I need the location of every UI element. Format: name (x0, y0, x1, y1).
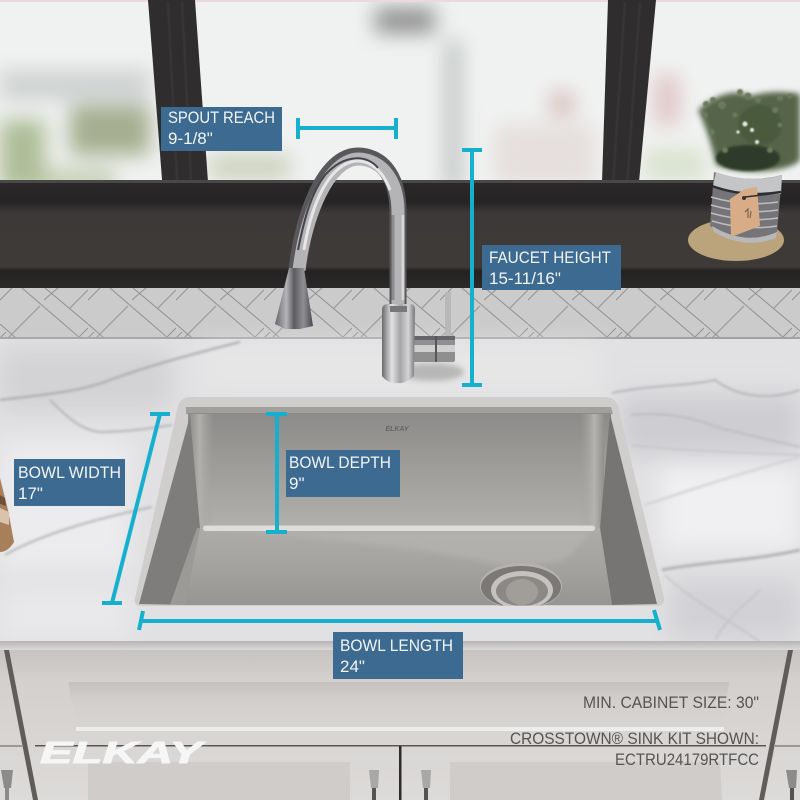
window frame: right mullion (597, 0, 656, 205)
left cabinet stile (4, 650, 38, 800)
label: bowl length (333, 632, 463, 679)
dimension: spout reach (298, 118, 396, 139)
tin can (710, 172, 782, 243)
faucet (275, 156, 464, 383)
label: spout reach: 9-1/8" (168, 129, 213, 148)
cutting board at left edge (0, 478, 14, 552)
counter front edge (0, 641, 800, 650)
floor reflection (210, 532, 590, 568)
sink (135, 397, 664, 609)
faucet lever handle (410, 292, 455, 362)
dimension: bowl width (102, 414, 170, 603)
right door panel (450, 762, 722, 800)
minimum cabinet size note: MIN. CABINET SIZE: 30" (583, 693, 759, 712)
faucet base (382, 304, 415, 383)
sink kit note (510, 729, 759, 769)
label: faucet height (482, 245, 621, 290)
label: bowl depth (286, 450, 400, 497)
cork coaster (688, 219, 784, 261)
window frame: left mullion (148, 0, 208, 205)
sink basin floor (185, 528, 612, 605)
left door panel (88, 762, 350, 800)
label: faucet height: 15-11/16" (489, 269, 561, 288)
plant foliage (698, 89, 800, 171)
countertop (0, 339, 800, 650)
label: faucet height: FAUCET HEIGHT (489, 248, 611, 267)
sink kit note: ECTRU24179RTFCC (615, 750, 759, 769)
marble veins (0, 342, 800, 642)
sink basin back wall (188, 413, 611, 529)
backsplash (0, 288, 800, 340)
label: bowl length: BOWL LENGTH (340, 636, 453, 655)
sink left wall (139, 416, 200, 605)
sink rim (135, 397, 664, 606)
dimension: bowl depth (266, 414, 287, 532)
faucet shadow (400, 363, 464, 381)
label: bowl width (14, 459, 125, 506)
right cabinet stile (759, 650, 793, 800)
sink drain (480, 563, 562, 609)
elkay logo: ELKAY (40, 735, 207, 770)
sink inner lip (186, 407, 613, 414)
label: spout reach: SPOUT REACH (168, 108, 275, 127)
label: bowl width: BOWL WIDTH (18, 463, 121, 482)
right side cabinets edges (775, 745, 800, 747)
window sill (0, 180, 800, 288)
label: bowl depth: 9" (289, 474, 304, 493)
tag on can (730, 187, 770, 237)
centre door gap (399, 746, 402, 800)
faucet spray head (275, 268, 313, 329)
sink right wall (600, 414, 657, 605)
label: bowl width: 17" (18, 484, 43, 503)
dimension: faucet height (462, 150, 482, 385)
marble tone patches (0, 345, 800, 640)
window view (0, 0, 800, 190)
plant in tin can (688, 89, 800, 261)
cabinets (0, 650, 800, 800)
left side cabinets edges (0, 745, 22, 747)
faucet gooseneck spout (297, 156, 403, 308)
dimension: bowl length (139, 610, 660, 630)
drawer recessed panel (68, 682, 729, 731)
label: spout reach (161, 107, 282, 151)
sink kit note: CROSSTOWN® SINK KIT SHOWN: (510, 729, 759, 748)
drawer and door divider (35, 745, 766, 746)
label: bowl length: 24" (340, 657, 365, 676)
door handles (1, 770, 797, 800)
label: bowl depth: BOWL DEPTH (289, 453, 391, 472)
sink back corners (190, 414, 604, 528)
sink back ledge (203, 526, 595, 531)
sink engraved logo: ELKAY (385, 426, 410, 433)
